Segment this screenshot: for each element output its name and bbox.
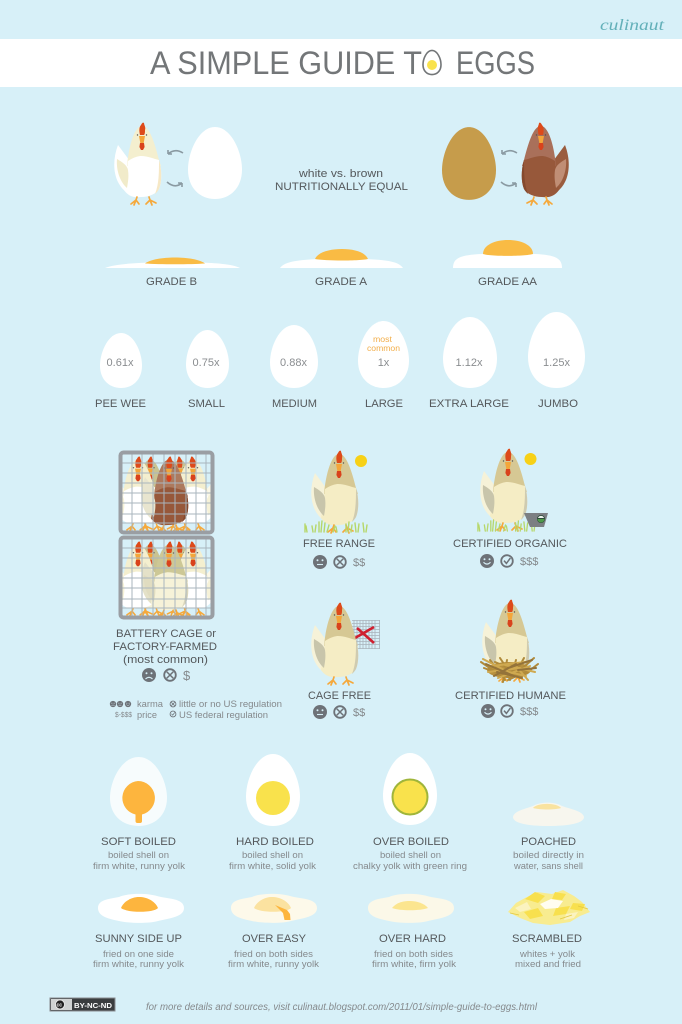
panel: hard boiled [229, 754, 317, 871]
icon: free range hen [311, 451, 358, 533]
panel: over easy [228, 894, 320, 969]
grade B: GRADE B [146, 276, 197, 288]
size: large: LARGE [365, 398, 403, 410]
panel: poached: water, sans shell [513, 861, 583, 871]
size: small: 0.75x [193, 357, 220, 369]
size: small: SMALL [188, 398, 225, 410]
panel: over boiled [353, 753, 467, 871]
ratings: $$ [353, 557, 365, 569]
heading: battery cage: (most common) [123, 654, 208, 666]
arrows: white hen and egg [167, 150, 183, 187]
legend: price [137, 710, 157, 720]
badge: creative commons [50, 998, 115, 1011]
size: extra large: 1.12x [456, 357, 483, 369]
size: large [358, 321, 409, 410]
size: medium: 0.88x [280, 357, 307, 369]
label: CERTIFIED HUMANE [455, 690, 566, 702]
heading: battery cage [113, 628, 217, 666]
icon: brown hen [522, 123, 569, 205]
panel: over hard [368, 894, 457, 969]
size: small [186, 330, 229, 410]
label: FREE RANGE [303, 538, 375, 550]
text: nutritionally equal [275, 168, 408, 193]
grade AA: GRADE AA [478, 276, 538, 288]
size: extra large [429, 317, 509, 410]
icon: organic hen [480, 449, 527, 531]
panel: over hard: OVER HARD [379, 933, 446, 945]
badge: creative commons: cc [56, 1002, 62, 1008]
icon: feed bowl [524, 513, 548, 527]
panel: over boiled: chalky yolk with green ring [353, 861, 467, 871]
size: large: most [373, 335, 393, 344]
panel: hard boiled: firm white, solid yolk [229, 861, 317, 871]
footer text: for more details and sources, visit culinaut.blogspot.com/2011/01/simple-guide-to-eggs.html [146, 1002, 538, 1013]
panel: scrambled: SCRAMBLED [512, 933, 582, 945]
text: nutritionally equal: white vs. brown [298, 168, 383, 180]
label: CERTIFIED ORGANIC [453, 538, 567, 550]
panel: sunny side up [93, 894, 185, 969]
panel: over boiled: OVER BOILED [373, 836, 449, 848]
icon: nest [481, 658, 538, 682]
legend [110, 699, 282, 720]
panel: egg grades [105, 240, 562, 288]
arrows: brown egg and hen [501, 150, 517, 187]
size: medium: MEDIUM [272, 398, 317, 410]
size: medium [270, 325, 318, 410]
heading: battery cage: FACTORY-FARMED [113, 641, 217, 653]
icon: crossed cage [352, 620, 380, 649]
panel: certified organic [453, 449, 567, 568]
ratings: battery cage [142, 668, 191, 683]
panel: battery cage [110, 452, 221, 683]
panel: egg sizes [95, 312, 585, 410]
panel: poached: boiled directly in [513, 850, 584, 860]
title band: O [423, 45, 441, 81]
panel: soft boiled: firm white, runny yolk [93, 861, 186, 871]
panel: soft boiled [93, 757, 186, 871]
legend: karma [137, 699, 163, 709]
title band [0, 39, 682, 87]
icon: grass [478, 520, 535, 531]
panel: cage free [308, 603, 380, 719]
icon: cage free hen [311, 603, 358, 685]
heading: battery cage: BATTERY CAGE or [116, 628, 216, 640]
icon: white hen [114, 123, 161, 205]
panel: sunny side up: firm white, runny yolk [93, 959, 185, 969]
icon: sun [524, 453, 536, 465]
icon: white egg [188, 127, 242, 199]
icon: grass [305, 521, 367, 532]
panel: over hard: fried on both sides [374, 949, 454, 959]
size: large: common [367, 344, 400, 353]
size: pee wee: PEE WEE [95, 398, 146, 410]
title band: A SIMPLE GUIDE T [150, 45, 422, 81]
size: extra large: EXTRA LARGE [429, 398, 509, 410]
panel: soft boiled: boiled shell on [108, 850, 169, 860]
panel: certified humane [455, 600, 566, 718]
icon: top cage [110, 452, 221, 532]
legend: little or no US regulation [179, 699, 282, 709]
logo: culinaut: culinaut [600, 17, 665, 34]
panel: poached: POACHED [521, 836, 576, 848]
title band: EGGS [456, 45, 535, 81]
panel: free range [303, 451, 375, 569]
size: pee wee [95, 333, 146, 410]
panel: over hard: firm white, firm yolk [372, 959, 457, 969]
text: nutritionally equal: NUTRITIONALLY EQUAL [275, 181, 408, 193]
panel: sunny side up: SUNNY SIDE UP [95, 933, 182, 945]
icon: sun [355, 455, 367, 467]
size: jumbo: 1.25x [543, 357, 570, 369]
ratings: $$$ [520, 706, 538, 718]
panel: hard boiled: HARD BOILED [236, 836, 314, 848]
label: CAGE FREE [308, 690, 371, 702]
panel: scrambled: whites + yolk [519, 949, 576, 959]
panel: over easy: fried on both sides [234, 949, 314, 959]
grade B [105, 258, 240, 288]
legend: US federal regulation [179, 710, 268, 720]
icon: bottom cage [110, 537, 221, 618]
size: large: 1x [378, 357, 390, 369]
ratings: $$$ [520, 556, 538, 568]
grade A [280, 249, 403, 288]
panel: soft boiled: SOFT BOILED [101, 836, 176, 848]
size: pee wee: 0.61x [107, 357, 134, 369]
badge: creative commons: BY-NC-ND [74, 1001, 113, 1010]
icon: scrambled eggs [508, 890, 590, 925]
legend: $-$$$ [115, 712, 132, 719]
icon: humane hen [482, 600, 529, 682]
panel: hard boiled: boiled shell on [242, 850, 303, 860]
size: jumbo: JUMBO [538, 398, 578, 410]
panel: scrambled [508, 890, 590, 969]
panel: scrambled: mixed and fried [515, 959, 581, 969]
ratings: $$ [353, 707, 365, 719]
panel: poached [513, 803, 584, 871]
panel: sunny side up: fried on one side [103, 949, 174, 959]
panel: white vs brown [114, 123, 569, 205]
grade AA [453, 240, 562, 288]
panel: over easy: firm white, runny yolk [228, 959, 320, 969]
panel: over easy: OVER EASY [242, 933, 307, 945]
size: jumbo [528, 312, 585, 410]
ratings: battery cage: $ [183, 668, 191, 683]
panel: over boiled: boiled shell on [380, 850, 441, 860]
grade A: GRADE A [315, 276, 368, 288]
icon: brown egg [442, 127, 496, 200]
